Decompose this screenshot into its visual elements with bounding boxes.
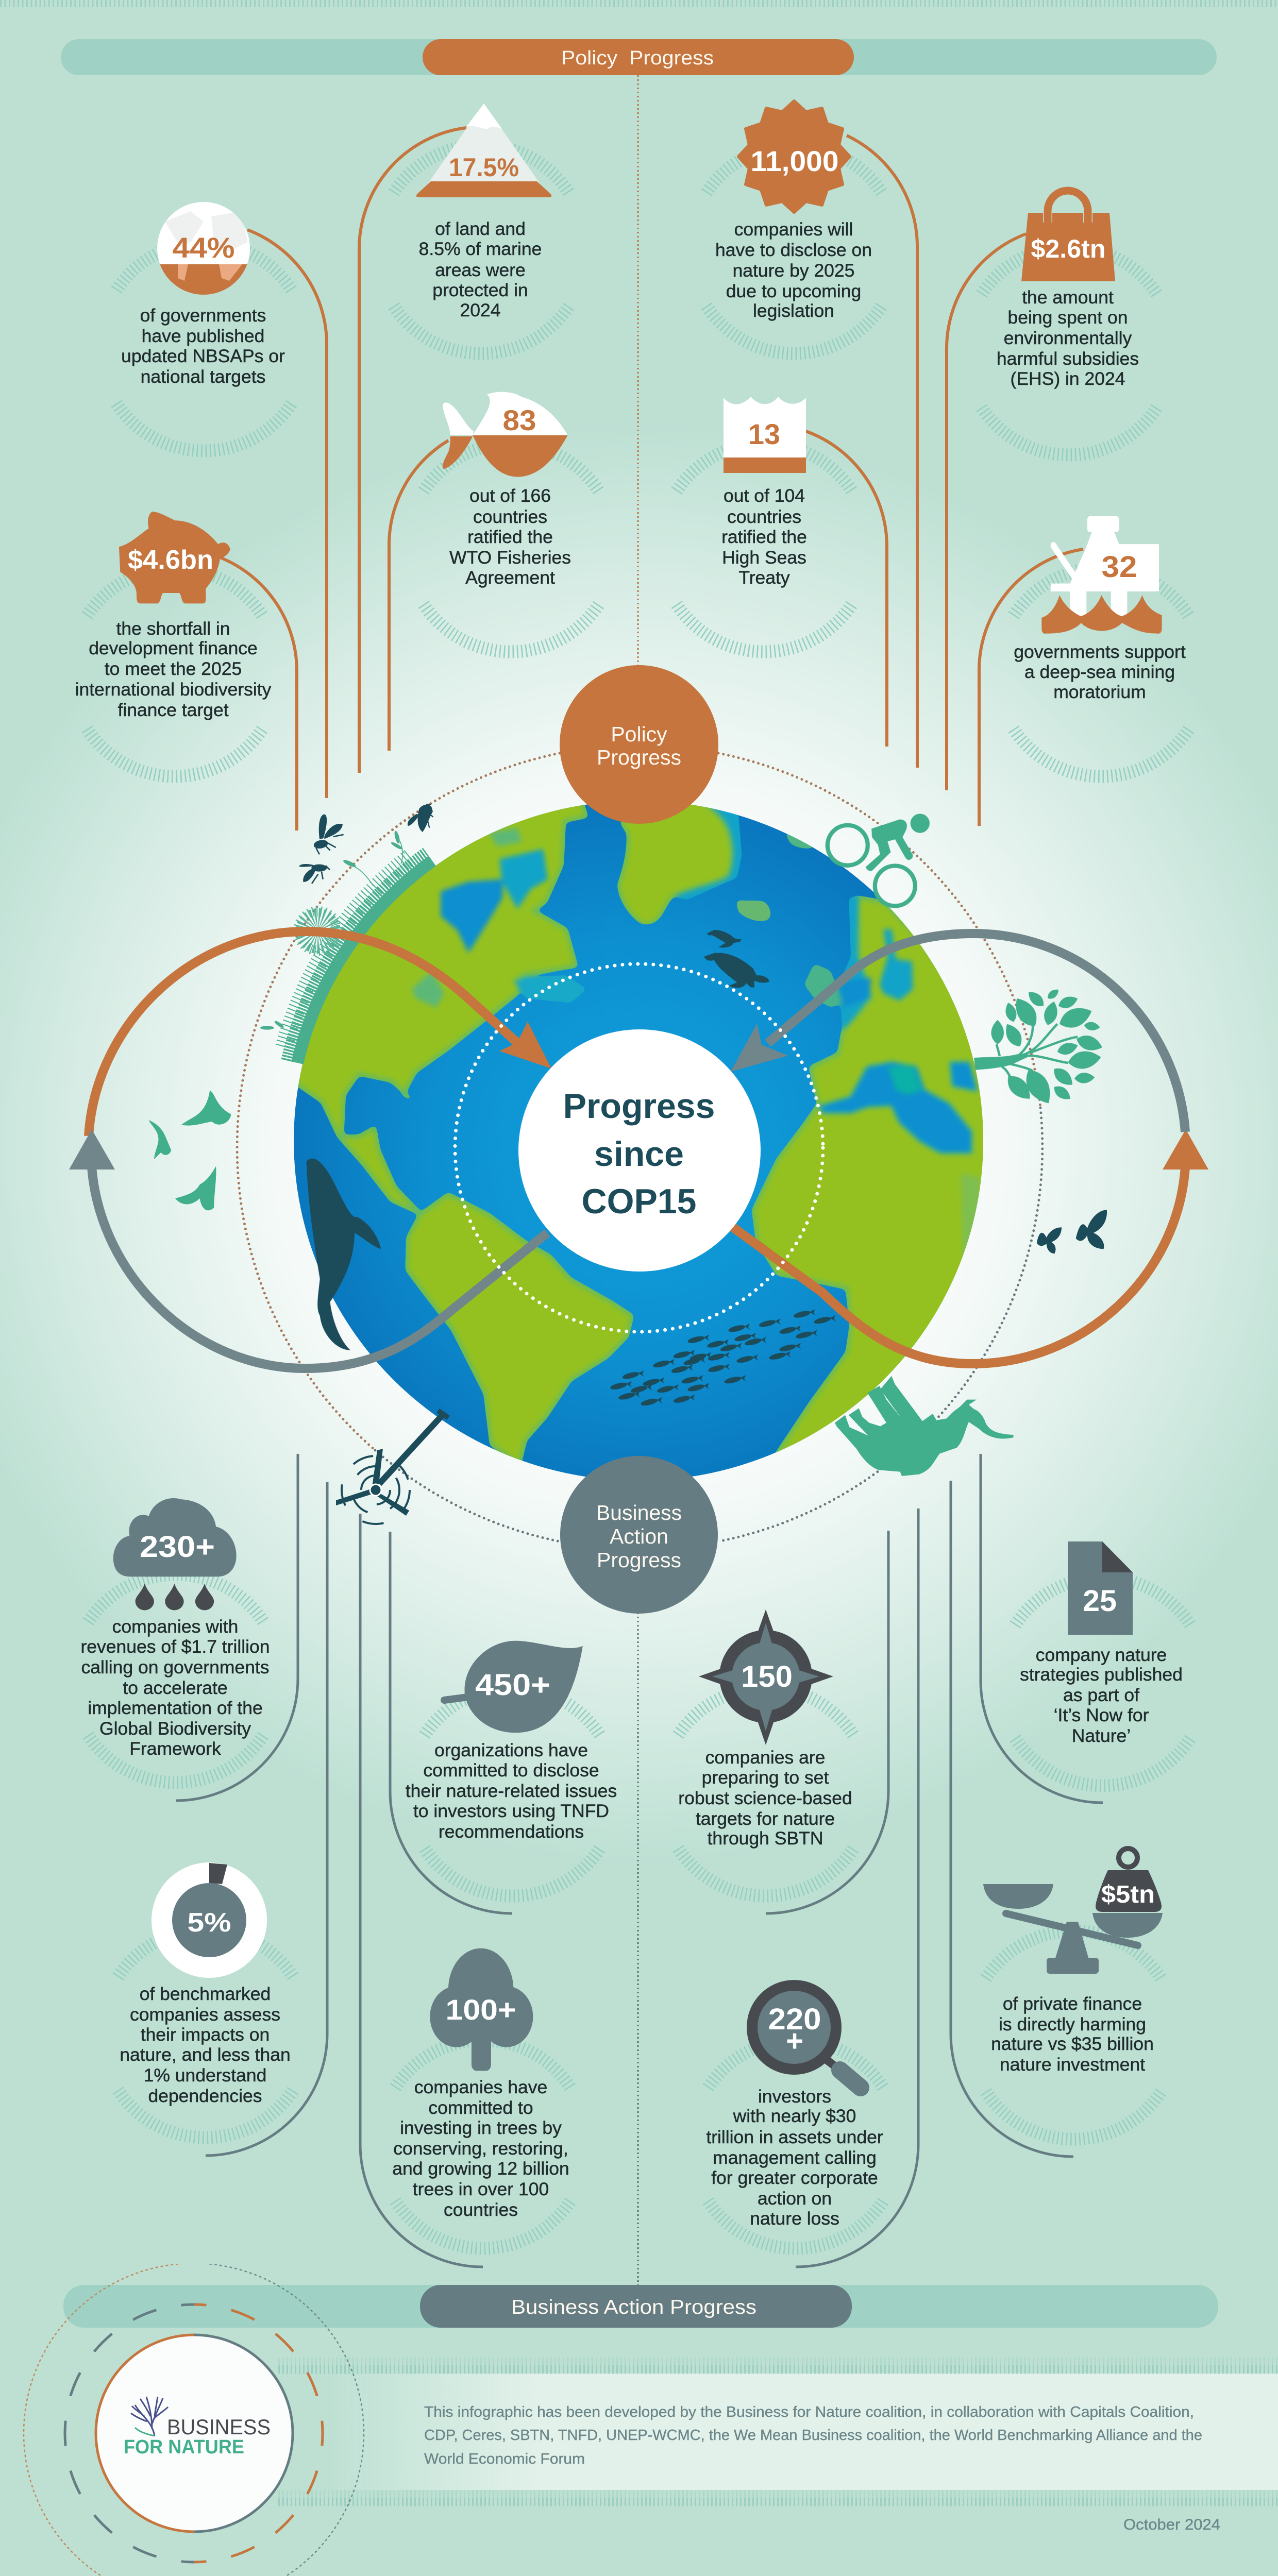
description: targets for nature [696,1808,835,1829]
description: areas were [435,260,526,280]
icon: birds [149,1090,231,1210]
description: a deep-sea mining [1024,662,1175,682]
icon: grass along globe edge [284,854,432,1063]
icon: piggy bank [119,512,230,603]
node: business action progress: Business [596,1501,682,1524]
description: of governments [140,305,266,326]
description: ratified the [721,527,807,547]
icon: fish shoal [610,1309,836,1407]
description: the shortfall in [116,618,230,639]
icon: bees [299,805,433,884]
footer credit text: CDP, Ceres, SBTN, TNFD, UNEP-WCMC, the We Mean Business coalition, the World Benchmarking Alliance and the [424,2427,1202,2444]
icon: whale [307,1159,381,1350]
description: to investors using TNFD [413,1801,609,1821]
card: 220+ investors [706,1980,883,2229]
description: companies have [414,2077,547,2097]
center hub: Progress since COP15 [518,1029,761,1272]
description: WTO Fisheries [449,547,571,568]
logo badge [24,2263,364,2576]
description: committed to disclose [423,1760,599,1781]
stat: $5tn [1101,1881,1155,1908]
description: international biodiversity [75,679,272,700]
stat: 150 [741,1660,793,1693]
description: nature vs $35 billion [991,2033,1154,2054]
infinity arrow: grey right loop [731,934,1185,1132]
top header bar: Policy Progress [61,39,1217,75]
description: organizations have [434,1740,588,1760]
description: finance target [117,700,229,720]
node: business action progress: Action [610,1524,668,1548]
stat: 450+ [475,1668,550,1702]
icon: rain cloud [113,1498,237,1611]
description: ‘It’s Now for [1054,1705,1149,1725]
logo wordmark: BUSINESS [167,2415,271,2439]
icon: offshore rig on waves [1041,516,1162,634]
card: 150 science-based targets [678,1609,852,1849]
icon: donut [152,1862,267,1978]
description: harmful subsidies [997,348,1139,369]
bottom header bar: Business Action Progress: Business Action Progress [511,2296,756,2318]
description: updated NBSAPs or [121,346,285,366]
logo wordmark: FOR NATURE [124,2436,244,2458]
description: calling on governments [81,1657,270,1677]
description: being spent on [1008,307,1128,328]
description: out of 104 [724,485,805,506]
description: have to disclose on [715,240,872,260]
stat: $2.6tn [1031,234,1106,263]
description: of land and [435,218,526,239]
node: policy progress: Policy [611,722,667,746]
connectors: policy cards [220,128,1083,831]
node: business action progress: Progress [597,1548,681,1572]
description: countries [727,506,801,527]
icon: compass [699,1609,833,1745]
continent: greenland [618,793,816,924]
description: of benchmarked [140,1984,271,2004]
icon: document [1068,1541,1133,1635]
stat: 230+ [140,1530,215,1564]
infinity arrow: orange left loop [89,931,551,1136]
description: companies assess [130,2004,280,2025]
description: to meet the 2025 [105,658,242,679]
card: 230+ companies [80,1498,270,1759]
description: protected in [432,280,528,300]
description: company nature [1036,1645,1167,1665]
icon: balance scale [983,1849,1163,1974]
center hub: Progress since COP15: since [594,1134,684,1174]
continent: north america [285,791,587,1214]
description: with nearly $30 [733,2106,856,2126]
description: of private finance [1003,1993,1142,2014]
icon: mountain [416,104,551,197]
card: 450+ organizations [406,1641,617,1842]
stat: + [786,2024,803,2058]
icon: wind turbine [336,1411,448,1524]
stat: 44% [172,231,235,264]
description: Treaty [738,567,790,588]
icon: tree [430,1948,533,2071]
description: is directly harming [999,2014,1146,2035]
description: countries [444,2199,518,2220]
description: and growing 12 billion [392,2158,569,2179]
description: nature loss [750,2208,839,2229]
description: nature by 2025 [733,260,854,281]
node: policy progress [560,665,718,824]
stat: $4.6bn [128,545,213,575]
icon: starburst [738,101,850,212]
center hub: Progress since COP15: COP15 [581,1182,697,1221]
icon: grass stalks [260,831,405,1030]
description: nature investment [1000,2054,1145,2075]
description: investing in trees by [400,2117,562,2138]
stat: 83 [503,404,536,436]
description: their impacts on [141,2024,270,2045]
card: 11,000 companies [715,101,872,321]
card: $4.6bn shortfall [75,512,272,720]
center hub: Progress since COP15: Progress [563,1087,715,1126]
description: High Seas [722,547,806,568]
description: have published [142,326,264,346]
description: preparing to set [702,1767,829,1788]
card: 44% governments [121,201,285,387]
description: as part of [1063,1685,1139,1705]
description: robust science-based [678,1788,852,1808]
description: companies with [112,1616,238,1637]
description: moratorium [1053,682,1146,702]
description: legislation [753,300,834,321]
description: companies are [705,1747,825,1768]
description: their nature-related issues [406,1781,617,1801]
top header bar: Policy Progress: Policy Progress [561,47,714,69]
stat: 25 [1083,1584,1117,1618]
card: 13 high seas [721,397,807,588]
description: development finance [89,638,258,658]
description: 8.5% of marine [419,239,542,259]
description: recommendations [439,1821,584,1842]
description: investors [758,2086,831,2107]
description: (EHS) in 2024 [1011,368,1125,389]
stat: 100+ [445,1993,516,2026]
stat: 220 [768,2003,821,2036]
icon: globe half filled [155,201,253,300]
description: Framework [129,1738,221,1759]
icon: elephant [835,1376,1014,1476]
icon: butterflies [1037,1210,1107,1253]
description: trillion in assets under [706,2127,883,2147]
continent: south america [407,1194,632,1465]
footer date: October 2024 [1123,2516,1220,2533]
description: the amount [1022,287,1114,308]
dotted vertical spine [637,75,639,2285]
card: $2.6tn subsidies [997,191,1139,389]
continent: eurasia and africa [753,897,989,1459]
infinity arrow: grey left loop [69,1129,547,1368]
icon: water block [724,397,806,473]
description: committed to [428,2097,533,2118]
description: revenues of $1.7 trillion [80,1636,270,1657]
card: 17.5% protected [416,104,551,320]
globe [285,791,989,1481]
description: dependencies [148,2086,262,2106]
footer band [278,2361,1278,2502]
description: Global Biodiversity [99,1718,251,1739]
icon: leaf [444,1641,583,1733]
description: conserving, restoring, [393,2138,568,2159]
infinity arrow: orange right loop [733,1129,1208,1364]
description: strategies published [1020,1664,1183,1685]
footer credit text: World Economic Forum [424,2451,585,2467]
top tick strip [0,0,1278,7]
icon: fish [443,392,568,477]
description: 2024 [460,300,500,320]
card: 100+ trees [392,1948,569,2220]
description: out of 166 [469,485,551,506]
description: ratified the [467,527,553,547]
description: governments support [1014,641,1186,662]
stat: 5% [188,1908,231,1938]
continents [285,791,989,1465]
node: business action progress [560,1456,718,1614]
description: to accelerate [123,1677,228,1698]
description: implementation of the [88,1698,263,1718]
description: management calling [713,2147,877,2168]
description: national targets [141,366,265,387]
description: action on [758,2188,832,2209]
outer dotted orbit [237,753,1042,1541]
logo rings [24,2263,364,2576]
description: environmentally [1004,328,1132,348]
connectors: business cards [176,1454,1103,2267]
stat: 13 [748,418,780,450]
stat: 11,000 [750,145,839,177]
description: for greater corporate [711,2167,878,2188]
stat: 17.5% [449,153,519,182]
tick rings behind the stat cards [87,145,1190,2248]
description: nature, and less than [120,2044,291,2065]
card: $5tn private finance [983,1849,1163,2075]
description: through SBTN [708,1828,823,1849]
description: trees in over 100 [413,2179,549,2199]
icon: turtles [704,930,769,988]
description: due to upcoming [726,281,861,301]
stat: 32 [1102,550,1137,584]
card: 83 WTO fisheries [443,392,571,588]
node: policy progress: Progress [597,745,681,769]
icon: shopping bag [1021,191,1115,281]
card: 32 deep-sea mining [1014,516,1186,702]
dotted white ring [455,964,823,1332]
footer credit text: This infographic has been developed by the Business for Nature coalition, in collaboration with Capitals Coalition, [424,2404,1194,2420]
card: 25 strategies [1020,1541,1183,1746]
description: countries [473,506,547,527]
bottom header bar: Business Action Progress [63,2285,1218,2328]
description: 1% understand [144,2065,266,2086]
icon: tree [974,987,1104,1109]
description: Agreement [465,567,555,588]
description: Nature’ [1072,1725,1131,1746]
card: 5% benchmarked [120,1862,291,2106]
description: companies will [734,219,853,240]
icon: magnifying glass [747,1980,861,2088]
logo sprig [131,2397,168,2436]
icon: cyclist [828,814,930,906]
